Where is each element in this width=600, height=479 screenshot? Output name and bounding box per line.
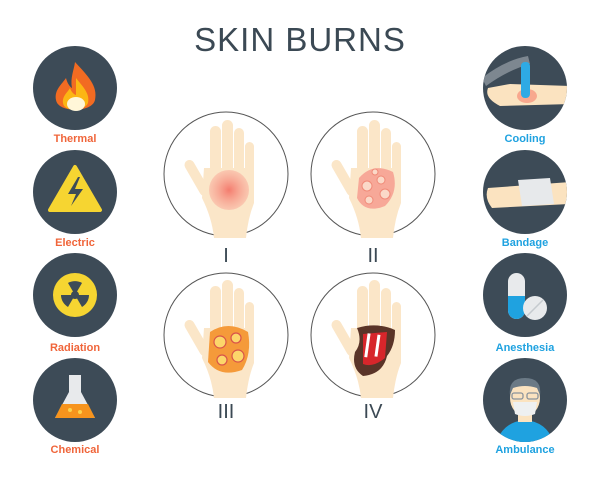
numeral II: II (367, 245, 379, 267)
icon: fire (56, 62, 96, 111)
panel: anesthesia (483, 253, 567, 354)
icon: radiation (53, 273, 97, 317)
hand with charred blisters (183, 280, 254, 398)
numeral IV: IV (364, 401, 383, 423)
panel: bandage (483, 150, 570, 249)
panel: electric (33, 150, 117, 249)
icon: pills (508, 273, 547, 320)
label: thermal: Thermal (54, 133, 96, 145)
icon: bandaged hand (487, 178, 570, 208)
label: radiation: Radiation (50, 342, 100, 354)
panel: degree IV (311, 273, 435, 423)
numeral I: I (223, 245, 229, 267)
panel: radiation (33, 253, 117, 354)
icon: flask (55, 375, 95, 418)
numeral III: III (218, 401, 234, 423)
panel: degree II (311, 112, 435, 267)
label: cooling: Cooling (505, 133, 545, 145)
title: SKIN BURNS (194, 21, 406, 58)
panel: cooling (482, 46, 570, 145)
panel: degree I (164, 112, 288, 267)
label: anesthesia: Anesthesia (496, 342, 555, 354)
icon: warning triangle (50, 167, 100, 210)
label: chemical: Chemical (51, 444, 99, 456)
panel: degree III (164, 273, 288, 423)
hand with deep burn (330, 280, 401, 398)
panel: chemical (33, 358, 117, 456)
icon: doctor (500, 378, 550, 442)
hand (183, 120, 254, 238)
panel: thermal (33, 46, 117, 145)
label: ambulance: Ambulance (495, 444, 555, 456)
label: electric: Electric (55, 237, 95, 249)
panel: ambulance (483, 358, 567, 456)
label: bandage: Bandage (502, 237, 548, 249)
hand with blisters (330, 120, 401, 238)
icon: hand under tap (482, 56, 570, 106)
